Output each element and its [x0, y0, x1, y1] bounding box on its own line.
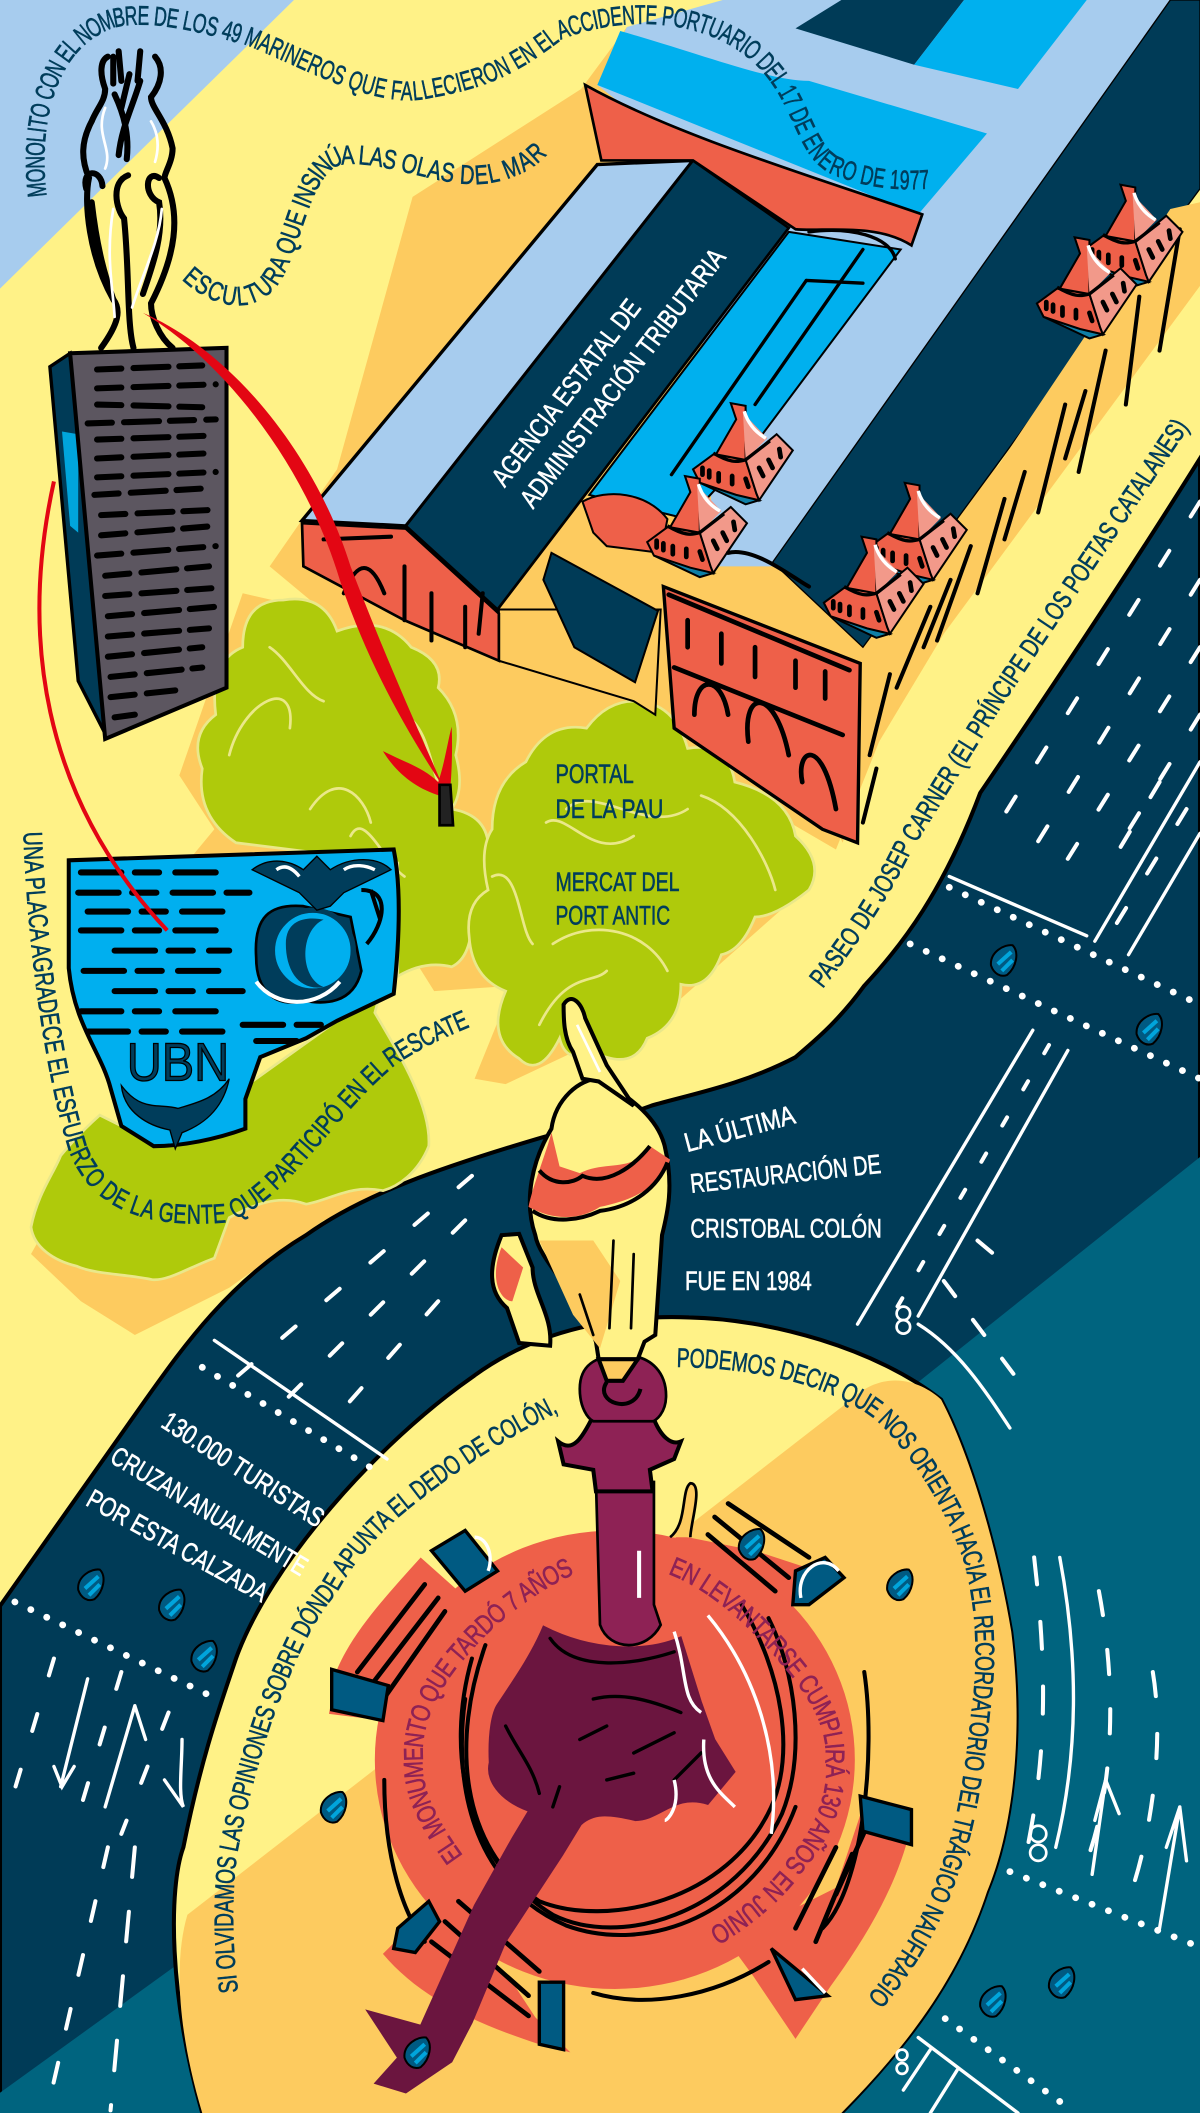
facade hatching orange	[809, 202, 1200, 843]
inner rings	[461, 1605, 796, 1935]
text: agency: AGENCIA ESTATAL DE	[486, 293, 647, 492]
central building recess	[543, 553, 658, 682]
navy roof with label	[406, 160, 789, 609]
pedestrians on road	[78, 945, 1162, 2017]
text: tourists: CRUZAN ANUALMENTE	[106, 1441, 313, 1582]
panel: roundabout	[174, 1317, 1017, 2113]
red dome under courtyard	[582, 494, 667, 553]
tree canopy lower left	[31, 944, 429, 1280]
text: restoration note: LA ÚLTIMA	[681, 1099, 798, 1158]
text: garden labels: PORT ANTIC	[556, 901, 670, 931]
text: monumento arc: EL MONUMENTO QUE TARDÓ 7 AÑOS	[404, 1558, 572, 1866]
text: restoration note: CRISTOBAL COLÓN	[690, 1212, 882, 1243]
plaque whale tail	[121, 1079, 229, 1149]
tree outlines	[229, 647, 775, 1025]
red arrow from sculpture	[143, 313, 452, 809]
right facade	[663, 587, 860, 843]
stair wings of platform	[329, 1535, 910, 2052]
text: agency: ADMINISTRACIÓN TRIBUTARIA	[513, 242, 731, 513]
road: dark navy main carriageway	[0, 458, 1200, 2113]
palm shadow	[529, 1133, 670, 1217]
stair lines	[357, 1504, 870, 2016]
sculpture bases around platform	[332, 1530, 911, 2050]
column of Columbus	[558, 1355, 681, 1645]
red arrow to plaque	[39, 481, 167, 930]
road markings upper right	[858, 502, 1200, 1428]
palm	[530, 1079, 669, 1359]
cyan block top	[914, 0, 1087, 89]
roundabout orange half	[180, 1381, 1017, 2113]
engraved names	[88, 365, 216, 717]
roundabout light half	[174, 1317, 1017, 2113]
text: garden labels: PORTAL	[556, 759, 634, 789]
monolith face	[70, 348, 227, 739]
orange shadows of the trees	[31, 593, 809, 1335]
dark harbour block top	[796, 0, 964, 65]
text: garden labels	[556, 759, 680, 931]
text: paseo: PASEO DE JOSEP CARNER (EL PRÍNCIPE DE LOS POETAS CATALANES)	[808, 420, 1192, 988]
light blue street	[597, 0, 1170, 566]
ornamental snake by the column	[670, 1483, 696, 1537]
roof ridge stroke	[728, 552, 809, 587]
small plaque monolith marker	[440, 785, 453, 825]
road markings left	[13, 1176, 472, 2110]
text: opiniones arc: SI OLVIDAMOS LAS OPINIONES SOBRE DÓNDE APUNTA EL DEDO DE COLÓN,	[214, 1398, 558, 1992]
plaque initials: UBN	[127, 1033, 229, 1093]
plaque engraved lines	[78, 872, 324, 1041]
Columbus pointing hand	[492, 999, 670, 1381]
text: tourists: POR ESTA CALZADA	[82, 1484, 273, 1608]
navy right roof	[773, 0, 1200, 647]
monument platform	[329, 1504, 911, 2052]
figures on roundabout	[321, 1529, 913, 2068]
text: podemos arc: PODEMOS DECIR QUE NOS ORIENTA HACIA EL RECORDATORIO DEL TRÁGICO NAUFRAGIO	[678, 1348, 995, 2006]
bicycle symbols	[897, 1307, 1046, 2074]
cyan inner courtyard	[589, 232, 901, 519]
left roof	[302, 160, 693, 526]
anchor globe emblem	[252, 856, 391, 1002]
column shadow	[367, 1626, 735, 2093]
tree canopy left	[198, 599, 490, 976]
text: monolito arc: MONOLITO CON EL NOMBRE DE LOS 49 MARINEROS QUE FALLECIERON EN EL ACCIDENTE PORTUARIO DEL 17 DE ENERO DE 1977	[26, 5, 928, 197]
tree canopy right	[469, 701, 815, 1065]
left facade	[302, 523, 499, 661]
sea area top left	[0, 0, 294, 289]
text: levantarse arc: EN LEVANTARSE CUMPLIRÁ 130 AÑOS EN JUNIO	[669, 1556, 850, 1943]
white highlights on shadow	[665, 1615, 774, 1834]
bronze plaque	[69, 850, 399, 1149]
text: garden labels: DE LA PAU	[556, 794, 663, 824]
red pediment	[585, 85, 922, 245]
corner towers	[647, 185, 1182, 638]
orange promenade band	[270, 0, 1025, 850]
pointing finger	[564, 999, 634, 1106]
text: restoration note: FUE EN 1984	[685, 1266, 812, 1296]
text: escultura: ESCULTURA QUE INSINÚA LAS OLAS DEL MAR	[182, 143, 548, 306]
monolith	[50, 348, 227, 739]
text: garden labels: MERCAT DEL	[556, 867, 680, 897]
navy central roof underside	[499, 609, 661, 715]
text: tourists: 130.000 TURISTAS	[156, 1406, 330, 1533]
text: restoration note: RESTAURACIÓN DE	[689, 1148, 882, 1199]
monolith side	[50, 353, 108, 739]
text: restoration note	[681, 1099, 882, 1296]
road markings lower right	[903, 1557, 1200, 2113]
teal water lower right	[0, 1157, 1200, 2113]
panel: tax agency building	[302, 85, 1182, 843]
panel: gardens	[31, 599, 815, 1280]
sculpture of waves	[83, 51, 174, 348]
thumb	[492, 1234, 550, 1346]
text: placa: UNA PLACA AGRADECE EL ESFUERZO DE LA GENTE QUE PARTICIPÓ EN EL RESCATE	[23, 832, 470, 1224]
platform disc	[375, 1530, 855, 1989]
text: tourists	[82, 1406, 330, 1608]
cyan courtyard top	[597, 31, 987, 214]
